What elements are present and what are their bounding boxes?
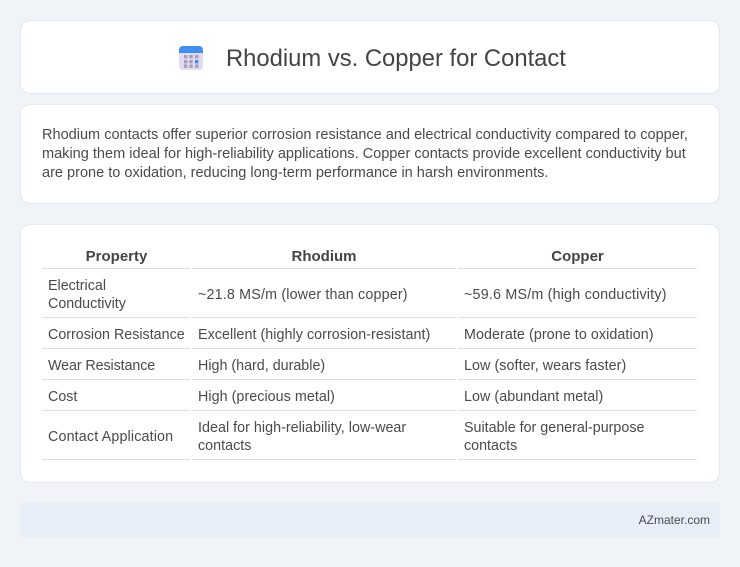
- value: copper wear: Low (softer, wears faster): [464, 358, 626, 374]
- panel: title card: [20, 20, 720, 94]
- footer: brand: AZmater.com: [639, 513, 710, 527]
- value: rhodium corrosion: Excellent (highly corrosion-resistant): [198, 327, 430, 343]
- value: rhodium application: [198, 420, 406, 454]
- value: rhodium cost: High (precious metal): [198, 389, 335, 405]
- value: copper cost: Low (abundant metal): [464, 389, 603, 405]
- value: rhodium application: Ideal for high-reliability, low-wear: [198, 420, 406, 436]
- panel: comparison table card: [20, 224, 720, 483]
- value: copper application: [464, 420, 644, 454]
- text block: intro: are prone to oxidation, reducing long-term performance in harsh environments.: [42, 165, 548, 181]
- value: rhodium application: contacts: [198, 438, 251, 454]
- header: Rhodium: Rhodium: [292, 248, 356, 265]
- icon: calendar: [179, 46, 203, 70]
- text block: intro: Rhodium contacts offer superior corrosion resistance and electrical conductivity compared to copper,: [42, 127, 688, 143]
- value: rhodium wear: High (hard, durable): [198, 358, 325, 374]
- header: Copper: Copper: [551, 248, 604, 265]
- row: electrical conductivity: [48, 278, 126, 312]
- value: copper corrosion: Moderate (prone to oxidation): [464, 327, 654, 343]
- row: electrical conductivity: Conductivity: [48, 296, 126, 312]
- value: copper application: Suitable for general-purpose: [464, 420, 644, 436]
- footer bar: [20, 503, 720, 537]
- panel: intro text card: [20, 104, 720, 204]
- title: Rhodium vs. Copper for Contact: [226, 45, 566, 72]
- row: electrical conductivity: Electrical: [48, 278, 106, 294]
- text block: intro: making them ideal for high-reliability applications. Copper contacts provide excellent conductivity but: [42, 146, 686, 162]
- row: wear resistance: Wear Resistance: [48, 358, 155, 374]
- row: cost: Cost: [48, 389, 77, 405]
- row: corrosion resistance: Corrosion Resistance: [48, 327, 185, 343]
- value: copper application: contacts: [464, 438, 517, 454]
- text block: intro: [42, 127, 688, 181]
- value: copper conductivity: ~59.6 MS/m (high conductivity): [464, 287, 667, 303]
- header: Property: Property: [86, 248, 147, 265]
- row: contact application: Contact Application: [48, 429, 173, 445]
- value: rhodium conductivity: ~21.8 MS/m (lower than copper): [198, 287, 408, 303]
